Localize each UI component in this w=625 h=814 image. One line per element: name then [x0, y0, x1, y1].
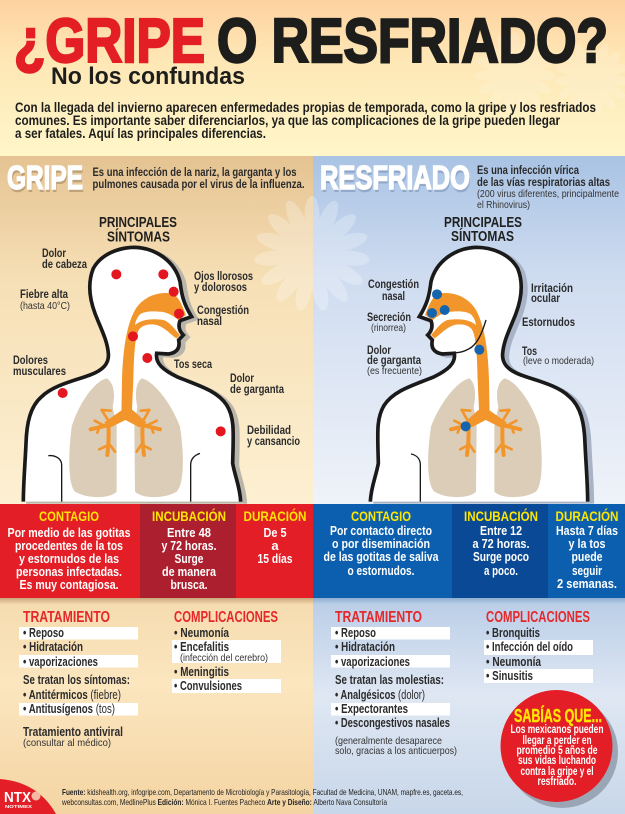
gripe red band	[0, 504, 313, 598]
gripe symptom labels: nasal	[197, 314, 222, 328]
resfriado symptom labels: de garganta	[367, 353, 421, 367]
contagio gripe: procedentes de la tos	[15, 538, 123, 553]
contagio resfriado: CONTAGIO	[351, 508, 411, 524]
source credits: webconsultas.com, MedlinePlus Edición: Mónica I. Fuentes Pacheco Arte y Diseño: Alberto Nava Consultoría	[61, 798, 387, 807]
panel: gripe symptoms background	[0, 156, 313, 504]
gripe body diagram	[23, 247, 245, 504]
contagio resfriado: Por contacto directo	[330, 523, 432, 538]
incubacion resfriado: a 72 horas.	[472, 536, 530, 551]
contagio resfriado: o estornudos.	[348, 563, 414, 578]
callout: sabias que: contra la gripe y el	[520, 766, 594, 778]
gripe symptom labels: (hasta 40°C)	[20, 300, 70, 312]
duracion resfriado	[556, 507, 618, 591]
tratamiento resfriado: solo, gracias a los anticuerpos)	[335, 745, 457, 757]
resfriado symptom labels: (leve o moderada)	[523, 355, 594, 367]
complicaciones resfriado: • Bronquitis	[486, 626, 540, 640]
gripe symptom labels: y dolorosos	[194, 280, 247, 294]
gripe symptom labels	[13, 246, 300, 448]
duracion gripe: 15 días	[258, 551, 292, 566]
gripe symptom labels: Dolor	[42, 246, 66, 260]
tratamiento resfriado: TRATAMIENTO	[335, 609, 422, 626]
tratamiento resfriado	[331, 609, 457, 757]
gripe symptom labels: musculares	[13, 364, 66, 378]
gripe symptom labels: Dolores	[13, 353, 48, 367]
tratamiento gripe: • Antitérmicos (fiebre)	[23, 688, 121, 702]
header background	[0, 0, 625, 156]
gripe description	[92, 165, 304, 191]
tratamiento resfriado: • Descongestivos nasales	[335, 716, 450, 730]
contagio gripe: y estornudos de las	[19, 551, 119, 566]
title: ¿GRIPE	[14, 7, 205, 76]
gripe symptom labels: Debilidad	[247, 423, 291, 437]
tratamiento gripe: Se tratan los síntomas:	[23, 673, 130, 687]
tratamiento resfriado: • Hidratación	[335, 640, 395, 654]
resfriado symptoms heading: SÍNTOMAS	[451, 228, 514, 245]
resfriado symptom labels: Dolor	[367, 343, 391, 357]
incubacion gripe: brusca.	[170, 577, 208, 592]
contagio gripe: personas infectadas.	[16, 564, 122, 579]
tratamiento gripe: • Hidratación	[23, 640, 83, 654]
gripe symptom labels: y cansancio	[247, 434, 300, 448]
contagio gripe: CONTAGIO	[39, 508, 99, 524]
tratamiento gripe: TRATAMIENTO	[23, 609, 110, 626]
incubacion gripe: de manera	[162, 564, 217, 579]
complicaciones resfriado: • Neumonía	[486, 655, 542, 669]
tratamiento gripe: • Antitusígenos (tos)	[23, 702, 115, 716]
duracion resfriado: puede	[572, 549, 602, 564]
contagio gripe	[8, 508, 130, 592]
lower panel: gripe background	[0, 598, 313, 814]
gripe symptom labels: Tos seca	[174, 357, 212, 371]
complicaciones gripe: COMPLICACIONES	[174, 609, 278, 626]
tratamiento gripe	[19, 609, 138, 749]
incubacion resfriado	[464, 507, 538, 578]
complicaciones gripe: • Encefalitis	[174, 640, 229, 654]
resfriado symptom labels: Irritación	[531, 281, 573, 295]
resfriado symptom labels: Estornudos	[522, 315, 575, 329]
callout: sabias que	[500, 690, 618, 808]
incubacion gripe: Surge	[174, 551, 204, 566]
gripe description: pulmones causada por el virus de la influenza.	[92, 177, 304, 191]
complicaciones gripe	[172, 609, 281, 693]
gripe symptom labels: de cabeza	[42, 257, 87, 271]
resfriado description: el Rhinovirus)	[477, 199, 530, 211]
gripe symptoms heading	[99, 215, 177, 246]
resfriado body diagram	[370, 247, 592, 504]
resfriado symptom labels: Tos	[522, 344, 537, 358]
resfriado symptom labels: (rinorrea)	[371, 322, 406, 334]
tratamiento gripe: • Reposo	[23, 626, 64, 640]
gripe symptom labels: de garganta	[230, 382, 284, 396]
incubacion gripe	[152, 507, 226, 592]
complicaciones gripe: • Convulsiones	[174, 679, 242, 693]
incubacion gripe: y 72 horas.	[162, 538, 216, 553]
gripe symptoms heading: PRINCIPALES	[99, 215, 177, 231]
heading: gripe: GRIPE	[7, 159, 83, 196]
resfriado description: Es una infección vírica	[477, 163, 579, 177]
tratamiento gripe: (consultar al médico)	[23, 737, 111, 749]
tratamiento gripe: Tratamiento antiviral	[23, 725, 123, 739]
resfriado blue band	[313, 504, 625, 598]
duracion gripe: DURACIÓN	[244, 507, 306, 524]
subtitle: No los confundas	[51, 63, 245, 90]
complicaciones resfriado: • Infección del oído	[486, 640, 573, 654]
contagio gripe: Es muy contagiosa.	[20, 577, 118, 592]
tratamiento resfriado: • Expectorantes	[335, 702, 408, 716]
resfriado description	[477, 163, 619, 211]
complicaciones gripe: • Meningitis	[174, 665, 229, 679]
tratamiento resfriado: • vaporizaciones	[335, 655, 410, 669]
intro text	[15, 99, 596, 141]
logo: NTX Notimex	[0, 779, 56, 814]
logo: NTX Notimex: NTX	[4, 789, 31, 806]
contagio resfriado: de las gotitas de saliva	[324, 549, 439, 564]
gripe symptom labels: Congestión	[197, 303, 249, 317]
source credits	[61, 788, 463, 807]
resfriado symptom labels: Congestión	[368, 277, 419, 291]
gripe description: Es una infección de la nariz, la garganta y los	[92, 165, 297, 179]
heading: resfriado: RESFRIADO	[321, 162, 471, 199]
incubacion resfriado: Surge poco	[473, 549, 529, 564]
duracion gripe: De 5	[264, 525, 286, 540]
lower panel: resfriado background	[313, 598, 625, 814]
duracion gripe	[244, 507, 306, 566]
contagio gripe: Por medio de las gotitas	[8, 525, 130, 540]
incubacion gripe: Entre 48	[167, 525, 211, 540]
resfriado symptom labels: ocular	[531, 291, 560, 305]
resfriado symptom labels	[367, 277, 594, 377]
panel: resfriado symptoms background	[313, 156, 625, 504]
duracion gripe: a	[271, 538, 279, 553]
tratamiento gripe: • vaporizaciones	[23, 655, 98, 669]
heading: resfriado: RESFRIADO	[320, 159, 470, 196]
complicaciones resfriado	[484, 609, 593, 683]
incubacion resfriado: Entre 12	[480, 523, 522, 538]
duracion resfriado: seguir	[572, 563, 602, 578]
logo: NTX Notimex: NOTIMEX	[5, 804, 32, 809]
resfriado symptoms heading	[444, 215, 522, 245]
callout: sabias que: llegar a perder en	[522, 735, 592, 747]
tratamiento resfriado: • Analgésicos (dolor)	[335, 688, 425, 702]
incubacion gripe: INCUBACIÓN	[152, 507, 226, 524]
complicaciones resfriado: COMPLICACIONES	[486, 609, 590, 626]
incubacion resfriado: INCUBACIÓN	[464, 507, 538, 524]
tratamiento resfriado: (generalmente desaparece	[335, 735, 442, 747]
gripe symptom labels: Fiebre alta	[20, 287, 68, 301]
tratamiento resfriado: Se tratan las molestias:	[335, 673, 444, 687]
tratamiento resfriado: • Reposo	[335, 626, 376, 640]
callout: sabias que: sus vidas luchando	[518, 755, 596, 767]
complicaciones gripe: • Neumonía	[174, 626, 230, 640]
gripe symptom labels: Dolor	[230, 371, 254, 385]
incubacion resfriado: a poco.	[484, 563, 518, 578]
virus flower decoration	[254, 196, 370, 312]
complicaciones resfriado: • Sinusitis	[486, 669, 533, 683]
contagio resfriado: o por diseminación	[332, 536, 430, 551]
resfriado symptom labels: Secreción	[367, 310, 411, 324]
resfriado symptom labels: (es frecuente)	[367, 365, 422, 377]
contagio resfriado	[324, 508, 439, 578]
callout: sabias que: resfriado.	[538, 776, 576, 788]
title	[14, 7, 608, 76]
complicaciones gripe: (infección del cerebro)	[180, 652, 268, 664]
gripe symptoms heading: SÍNTOMAS	[107, 228, 170, 246]
source credits: Fuente: kidshealth.org, infogripe.com, Departamento de Microbiología y Parasitología, Facultad de Medicina, UNAM, mapfre.es, gaceta.es,	[62, 788, 463, 797]
decorative flowers	[474, 31, 625, 116]
heading: gripe: GRIPE	[8, 162, 84, 199]
resfriado symptoms heading: PRINCIPALES	[444, 215, 522, 231]
duracion resfriado: y la tos	[568, 536, 606, 551]
callout: sabias que: promedio 5 años de	[516, 745, 598, 757]
gripe symptom labels: Ojos llorosos	[194, 269, 253, 283]
resfriado symptom labels: nasal	[382, 289, 405, 303]
intro text: a ser fatales. Aquí las principales diferencias.	[15, 125, 266, 141]
